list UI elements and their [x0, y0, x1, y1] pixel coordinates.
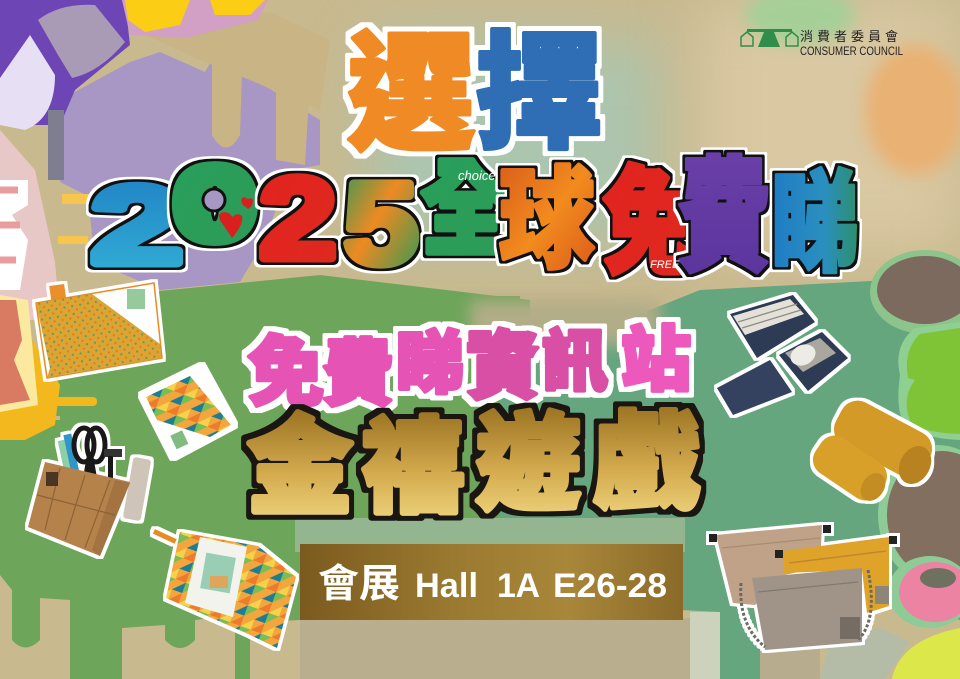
logo text: 消費者委員會: [800, 29, 902, 44]
banner text: [318, 563, 667, 606]
heading: 免費睇資訊站: 資: [466, 325, 540, 408]
icon: green scales: [741, 29, 798, 47]
heading: 免費睇資訊站: 費: [322, 335, 394, 415]
heading: 免費睇資訊站: 免: [248, 331, 324, 416]
teal paint area: [500, 280, 960, 679]
heading: 金禧遊戲: 戲: [594, 405, 700, 523]
banner text: Hall: [415, 567, 478, 605]
heading: 選擇: 擇: [476, 23, 602, 164]
left graffiti letter: [0, 130, 60, 320]
heading: 免費睇資訊站: 睇: [396, 326, 464, 402]
heading: 金禧遊戲: 金: [248, 410, 352, 526]
heading: 2025全球免費睇: 免: [603, 160, 693, 290]
item: folded travel wallet: [153, 529, 296, 648]
purple paint splash: [60, 52, 320, 290]
graffiti tags and hearts: choice: [458, 168, 496, 183]
heading: 2025全球免費睇: 0: [176, 148, 254, 259]
heading: 免費睇資訊站: 站: [621, 321, 691, 399]
item: square card: [141, 365, 235, 458]
item: woven pencil holder: [28, 428, 151, 556]
right graffiti blobs: [870, 250, 960, 334]
banner text: 1A: [497, 567, 540, 605]
heading: 2025全球免費睇: 2: [260, 154, 336, 282]
heading: 選擇: [347, 23, 602, 167]
green paint area: [0, 275, 530, 679]
heading: 2025全球免費睇: 睇: [771, 164, 859, 286]
banner text: E26-28: [553, 567, 667, 605]
item: zip pouches: [709, 525, 897, 650]
heading: 2025全球免費睇: 2: [91, 163, 183, 287]
item: rolled towels: [807, 394, 938, 507]
graffiti tags and hearts: FREE: [650, 259, 680, 271]
logo text: [800, 29, 903, 58]
heading: 金禧遊戲: [248, 405, 700, 526]
heading: 2025全球免費睇: 全: [421, 151, 511, 267]
heading: 金禧遊戲: 遊: [476, 407, 580, 523]
heading: 金禧遊戲: 禧: [362, 411, 464, 525]
item: packing cubes: [717, 295, 848, 415]
logo text: CONSUMER COUNCIL: [800, 44, 903, 58]
banner: venue: [300, 544, 683, 620]
heading: 2025全球免費睇: 球: [500, 159, 594, 281]
banner text: 會展: [318, 563, 400, 606]
item: picnic mat: [36, 283, 162, 378]
heading: 選擇: 選: [347, 24, 475, 167]
heading: 2025全球免費睇: 5: [344, 160, 418, 288]
heading: 2025全球免費睇: 費: [677, 149, 771, 287]
heading: 免費睇資訊站: [248, 321, 691, 416]
graffiti tags and hearts: [203, 168, 680, 271]
heading: 免費睇資訊站: 訊: [542, 324, 608, 398]
heading: 2025全球免費睇: [91, 148, 859, 290]
logo: Consumer Council: [741, 29, 903, 58]
